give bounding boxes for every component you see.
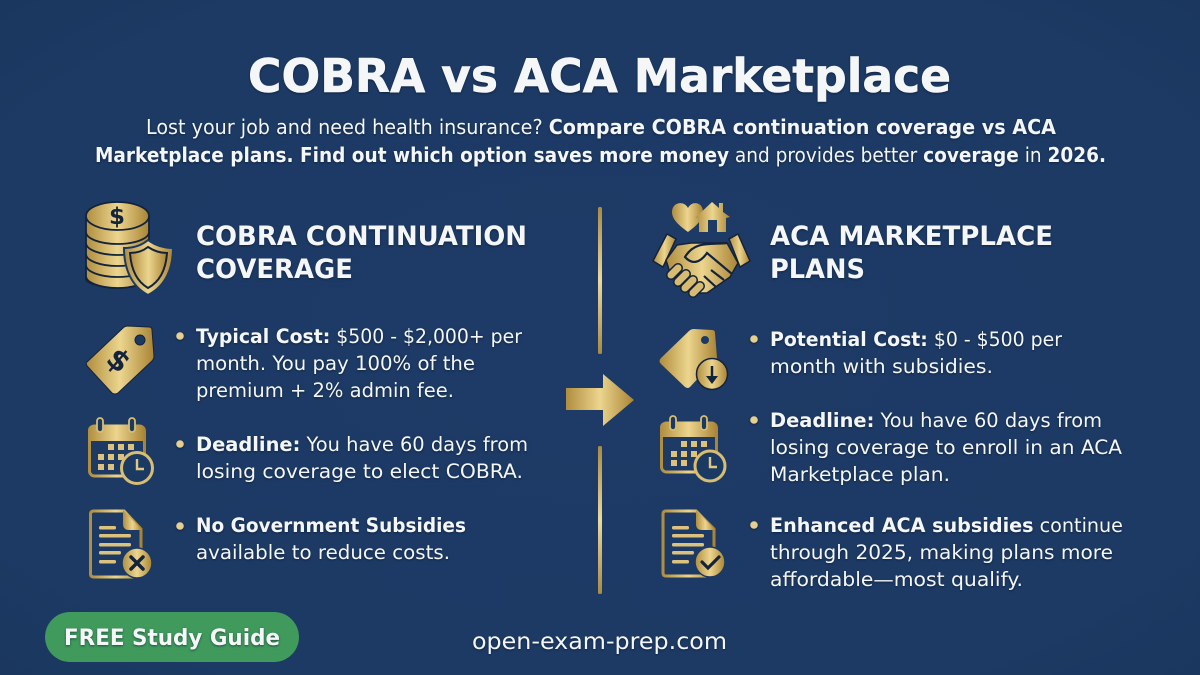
- bullet: deadline: losing coverage to enroll in an ACA: [770, 436, 1123, 459]
- bullet: enhanced ACA subsidies: [750, 514, 1123, 591]
- bullet: enhanced ACA subsidies: affordable—most qualify.: [770, 568, 1023, 591]
- bullet: deadline: Marketplace plan.: [770, 463, 950, 486]
- subtitle: [95, 115, 1106, 167]
- bullet: deadline: [176, 433, 528, 483]
- center divider with arrow: [566, 207, 634, 594]
- subtitle: Marketplace plans. Find out which option saves more money and provides better coverage in 2026.: [95, 143, 1106, 167]
- bullet: deadline: Deadline: You have 60 days from: [196, 433, 528, 456]
- bullet: no government subsidies: No Government Subsidies: [196, 514, 466, 537]
- bullet: deadline: losing coverage to elect COBRA.: [196, 460, 523, 483]
- heading: ACA marketplace plans: ACA MARKETPLACE: [770, 221, 1053, 252]
- panel: COBRA continuation coverage: [86, 202, 528, 578]
- button: free study guide: [45, 612, 299, 662]
- icon: coins and shield: $: [109, 204, 125, 230]
- icon: handshake with heart and house: [653, 202, 750, 293]
- heading: COBRA continuation coverage: COBRA CONTINUATION: [196, 221, 527, 252]
- website url: open-exam-prep.com: [472, 629, 727, 655]
- bullet: typical cost: month. You pay 100% of the: [196, 352, 475, 375]
- icon: coins and shield: [86, 202, 173, 295]
- icon: calendar with clock: [88, 418, 152, 484]
- panel: ACA marketplace plans: [653, 202, 1123, 591]
- icon: calendar with clock: [660, 416, 725, 481]
- heading: COBRA continuation coverage: COVERAGE: [196, 254, 353, 285]
- bullet: enhanced ACA subsidies: Enhanced ACA subsidies continue: [770, 514, 1123, 537]
- bullet: deadline: Deadline: You have 60 days from: [770, 409, 1102, 432]
- subtitle: Lost your job and need health insurance? Compare COBRA continuation coverage vs ACA: [146, 115, 1056, 139]
- button: free study guide: FREE Study Guide: [64, 626, 280, 651]
- heading: COBRA continuation coverage: [196, 221, 527, 285]
- arrow: [566, 374, 634, 426]
- title: COBRA vs ACA Marketplace: [248, 49, 951, 103]
- bullet: typical cost: [176, 325, 523, 402]
- bullet: enhanced ACA subsidies: through 2025, making plans more: [770, 541, 1113, 564]
- bullet: potential cost: month with subsidies.: [770, 355, 993, 378]
- heading: ACA marketplace plans: PLANS: [770, 254, 865, 285]
- icon: price tag with down arrow: [660, 329, 728, 390]
- bullet: potential cost: Potential Cost: $0 - $500 per: [770, 328, 1063, 351]
- bullet: deadline: [750, 409, 1123, 486]
- icon: document with x: [90, 510, 152, 578]
- bullet: typical cost: premium + 2% admin fee.: [196, 379, 454, 402]
- icon: dollar price tag: $: [100, 341, 137, 380]
- bullet: typical cost: Typical Cost: $500 - $2,000+ per: [196, 325, 523, 348]
- heading: ACA marketplace plans: [770, 221, 1053, 285]
- icon: document with check: [663, 510, 725, 577]
- bullet: no government subsidies: [176, 514, 466, 564]
- bullet: potential cost: [750, 328, 1063, 378]
- icon: dollar price tag: [86, 326, 154, 394]
- bullet: no government subsidies: available to reduce costs.: [196, 541, 450, 564]
